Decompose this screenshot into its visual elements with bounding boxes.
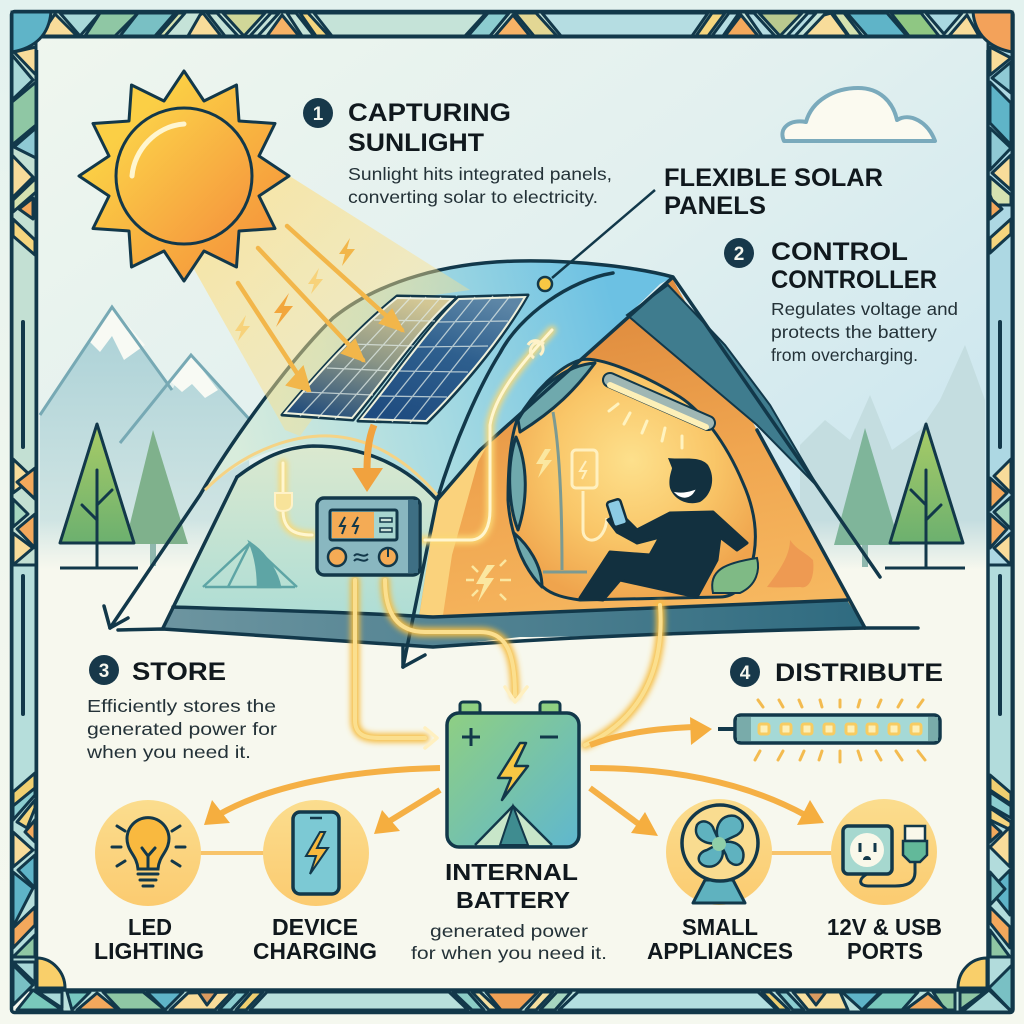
- LED lighting label: [94, 914, 204, 964]
- step 3 text: Efficiently stores the: [87, 696, 276, 716]
- LED lighting label: LIGHTING: [94, 938, 204, 964]
- green tree left: [60, 424, 138, 568]
- corner top-left: [12, 12, 51, 52]
- ray bolts: [235, 238, 355, 341]
- step 2 text: from overcharging.: [771, 345, 918, 365]
- solar panels label: [664, 164, 883, 220]
- sunbeam: [190, 170, 470, 436]
- vestibule: [163, 446, 437, 638]
- solar panels: [282, 295, 528, 423]
- ground fade: [37, 520, 987, 570]
- small appliances label: [647, 914, 793, 964]
- small appliances label: SMALL: [682, 914, 758, 940]
- corner bottom-right: [958, 958, 1012, 1012]
- small appliances label: APPLIANCES: [647, 938, 793, 964]
- solar panels label: PANELS: [664, 192, 766, 220]
- green tree right: [885, 424, 965, 568]
- LED lighting label: LED: [128, 914, 172, 940]
- solar label callout: [538, 190, 655, 291]
- ports label: 12V & USB: [827, 914, 942, 940]
- step 3 heading: 3: [99, 661, 109, 682]
- door flaps: [510, 363, 595, 587]
- corner top-right: [973, 12, 1012, 52]
- battery label: [411, 859, 607, 963]
- charge controller: [317, 498, 420, 575]
- battery: [447, 702, 579, 847]
- front panel: [417, 278, 865, 630]
- step 1 heading: SUNLIGHT: [348, 129, 484, 157]
- arrow to controller: [352, 425, 383, 492]
- step 4 heading: DISTRIBUTE: [775, 659, 943, 687]
- step 2 heading: [724, 238, 937, 294]
- step 2 text: Regulates voltage and: [771, 299, 958, 319]
- step 1 heading: [303, 98, 511, 157]
- flame: [767, 540, 813, 587]
- door: [508, 359, 755, 600]
- step 3 text: when you need it.: [86, 742, 251, 762]
- right bars: [998, 322, 1002, 714]
- step 4 heading: 4: [740, 663, 751, 684]
- step 2 heading: 2: [734, 244, 744, 265]
- battery label: INTERNAL: [445, 859, 578, 885]
- side flap: [627, 285, 818, 487]
- green cushion: [712, 558, 758, 593]
- mini tent icon: [203, 543, 297, 587]
- step 1 heading: 1: [313, 104, 324, 125]
- ground: [37, 568, 987, 990]
- tent fly: [200, 261, 673, 500]
- knot: [528, 341, 544, 358]
- step 2 text: protects the battery: [771, 322, 937, 342]
- tent: [104, 261, 918, 667]
- ports label: [827, 914, 942, 964]
- mountains right: [800, 345, 985, 570]
- pale tree left: [125, 430, 188, 566]
- icon: LED bulb: [95, 800, 201, 906]
- pale tree right: [834, 428, 900, 567]
- front highlight: [418, 278, 672, 625]
- step 1 text: [348, 164, 612, 207]
- ports label: PORTS: [847, 938, 923, 964]
- left bars: [21, 322, 25, 714]
- distribution arrows: [200, 717, 832, 853]
- step 1 text: converting solar to electricity.: [348, 187, 598, 207]
- battery label: generated power: [430, 921, 588, 941]
- step 4 heading: [730, 657, 943, 687]
- tent pole: [543, 412, 587, 572]
- icon: outlet and USB: [831, 799, 937, 905]
- mountains left: [40, 307, 252, 570]
- device charging label: [253, 914, 377, 964]
- LED strip: [718, 700, 940, 762]
- right strip: [988, 37, 1012, 990]
- step 1 text: Sunlight hits integrated panels,: [348, 164, 612, 184]
- smile: [676, 491, 694, 497]
- step 3 text: generated power for: [87, 719, 277, 739]
- step 1 heading: CAPTURING: [348, 99, 511, 127]
- floor band: [163, 600, 865, 647]
- battery label: for when you need it.: [411, 943, 607, 963]
- bottom strip: [37, 990, 987, 1012]
- person: [580, 458, 747, 600]
- sun: [79, 71, 289, 281]
- glowing wires: [283, 330, 661, 748]
- step 2 heading: CONTROL: [771, 238, 908, 266]
- plug: [275, 493, 292, 511]
- tent bolts: [466, 449, 552, 602]
- icon: phone: [263, 800, 369, 906]
- solar panels label: FLEXIBLE SOLAR: [664, 164, 883, 192]
- corner bottom-left: [13, 958, 65, 1010]
- left strip: [12, 37, 36, 990]
- icon: fan: [666, 799, 772, 905]
- phone charger: [572, 450, 607, 540]
- step 2 heading: CONTROLLER: [771, 266, 937, 294]
- cloud: [782, 88, 935, 141]
- step 3 text: [86, 696, 277, 762]
- sky panel: [37, 38, 987, 568]
- tent outlines: [104, 261, 918, 667]
- step 3 heading: [89, 655, 226, 686]
- sun rays: [238, 226, 403, 391]
- step 2 text: [771, 299, 958, 365]
- battery label: BATTERY: [456, 887, 570, 913]
- device charging label: DEVICE: [272, 914, 358, 940]
- top strip: [37, 12, 987, 37]
- device charging label: CHARGING: [253, 938, 377, 964]
- ceiling LED: [609, 380, 708, 448]
- yellow trim: [205, 436, 437, 495]
- phone: [606, 498, 628, 528]
- step 3 heading: STORE: [132, 658, 226, 686]
